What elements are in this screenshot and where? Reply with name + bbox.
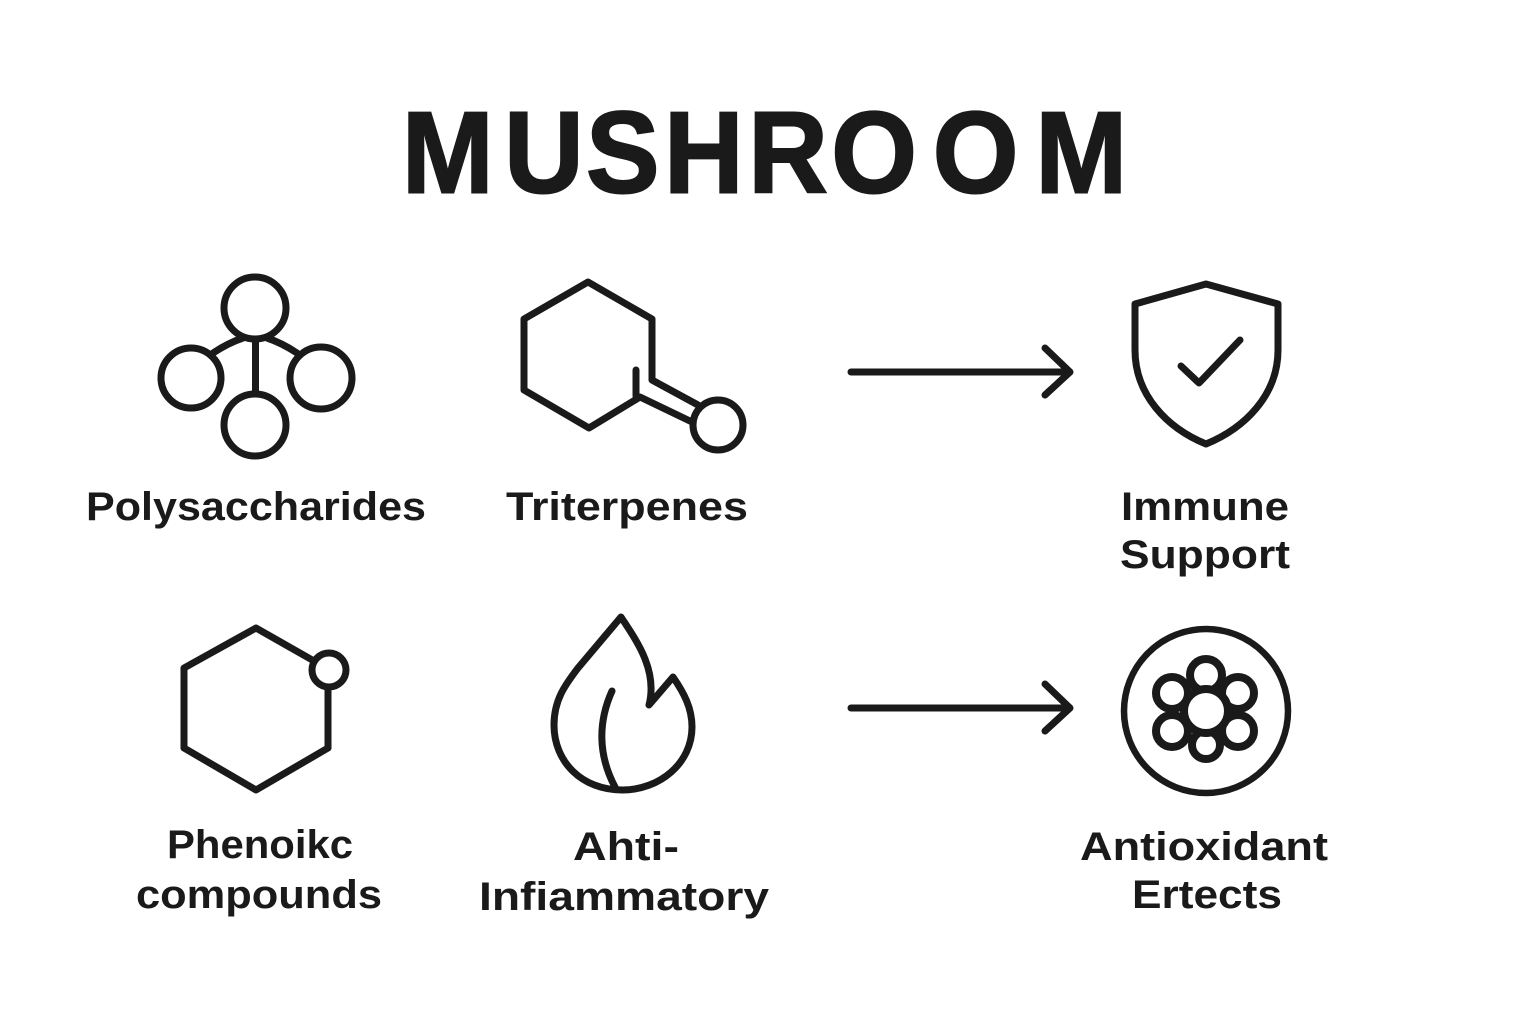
- label: anti-inflammatory: Ahti-: [573, 825, 679, 869]
- label: phenolic compounds: [136, 823, 382, 917]
- label: phenolic compounds: Phenoikc: [167, 823, 353, 867]
- label: anti-inflammatory: [479, 825, 770, 919]
- label: anti-inflammatory: Infiammatory: [479, 875, 770, 919]
- arrow: top: [851, 348, 1070, 395]
- icon: polysaccharides: [161, 277, 352, 456]
- arrow: bottom: [851, 684, 1070, 731]
- icon: phenolic: [184, 628, 346, 790]
- icon: antioxidant: [1124, 629, 1288, 793]
- label: antioxidant effects: [1080, 825, 1328, 917]
- label: immune support: [1120, 485, 1290, 577]
- title: MUSHROOM: [402, 88, 1127, 217]
- icon: shield: [1135, 284, 1278, 444]
- label: triterpenes: Triterpenes: [506, 485, 748, 529]
- icon: triterpenes: [524, 282, 743, 450]
- label: immune support: Support: [1120, 533, 1290, 577]
- label: antioxidant effects: Ertects: [1132, 873, 1282, 917]
- label: antioxidant effects: Antioxidant: [1080, 825, 1328, 869]
- label: polysaccharides: Polysaccharides: [86, 485, 426, 529]
- label: immune support: Immune: [1121, 485, 1289, 529]
- label: phenolic compounds: compounds: [136, 873, 382, 917]
- icon: flame: [554, 617, 692, 790]
